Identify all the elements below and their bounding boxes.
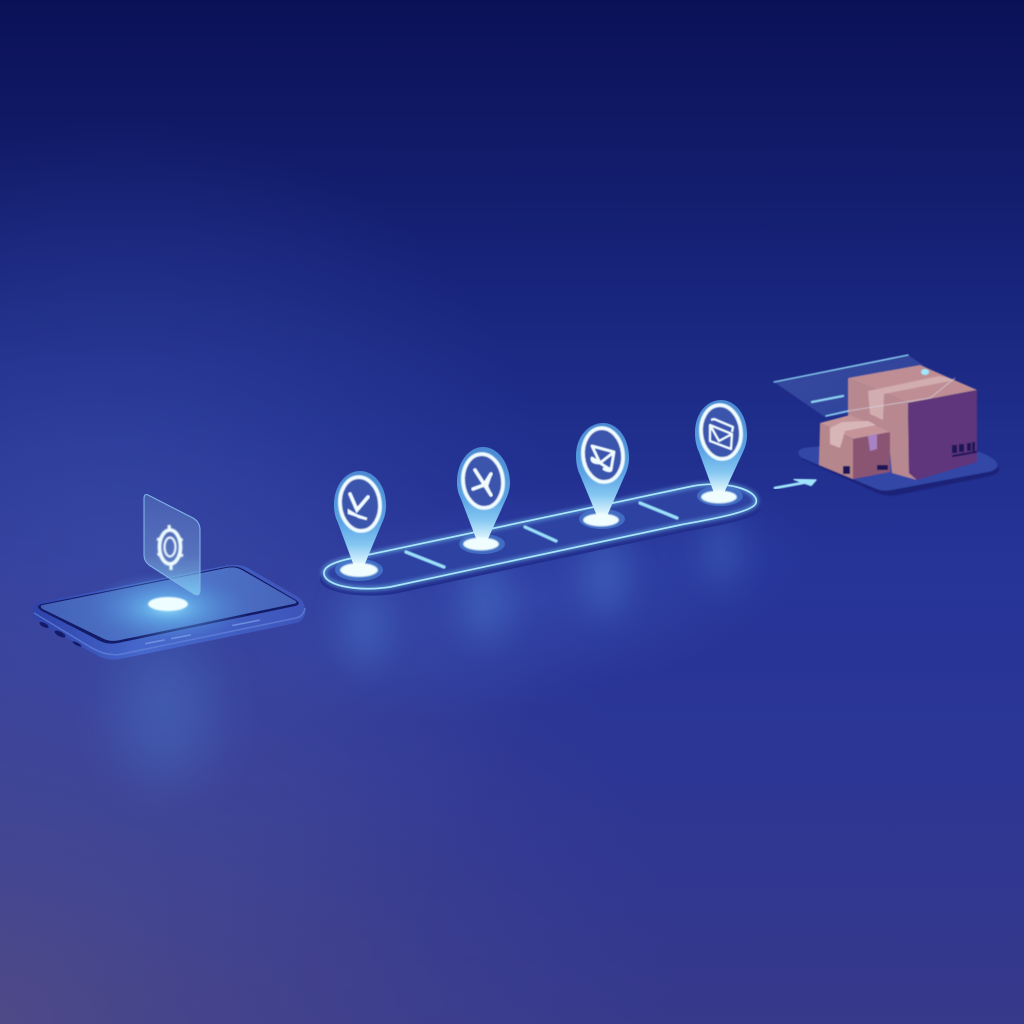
large box top face [848, 365, 977, 403]
base halo [459, 534, 505, 554]
glowing base [701, 490, 737, 504]
base halo [697, 486, 743, 506]
base halo [335, 559, 383, 581]
platform shadow [802, 440, 999, 496]
track base [320, 490, 760, 596]
location pin 1 [334, 471, 386, 581]
pin face [580, 426, 626, 484]
phone body [33, 565, 305, 660]
sheet front edge lines [774, 355, 955, 416]
large box right face [908, 390, 977, 480]
pin face [460, 452, 506, 510]
pin shape [576, 423, 629, 516]
phone screen bezel [38, 566, 299, 644]
large box barcode marks [952, 442, 977, 457]
holographic settings panel [144, 494, 200, 595]
holographic sheet [774, 355, 945, 417]
small box label [868, 434, 877, 451]
large box tape [868, 376, 955, 420]
location pin 4 [695, 400, 747, 506]
small box tape [830, 421, 876, 448]
pin face [337, 475, 383, 533]
glowing base [340, 563, 378, 577]
phone side buttons [145, 619, 260, 644]
icon: arrow to tray [349, 494, 368, 519]
small box top face [820, 415, 890, 439]
pin shape [334, 471, 386, 566]
gear icon [157, 525, 183, 570]
platform [798, 445, 997, 491]
phone ports [39, 621, 82, 648]
icon: crossed arrows [473, 470, 491, 495]
direction arrow [775, 480, 816, 488]
floor reflections [119, 514, 744, 780]
small box left face [819, 423, 853, 479]
track dashes [406, 503, 677, 567]
route track [320, 484, 760, 596]
large box left face [848, 378, 917, 480]
glowing base [463, 538, 499, 550]
track surface [324, 484, 756, 589]
location pin 3 [576, 423, 629, 529]
phone lower edge highlight [34, 608, 305, 655]
small box marks [843, 465, 888, 474]
location pin 2 [457, 447, 510, 554]
pin shape [457, 447, 510, 541]
screen light pool [86, 572, 250, 644]
small box right face [853, 432, 890, 479]
track line [324, 484, 756, 589]
glowing emitter [148, 597, 188, 611]
icon: folded envelope [592, 446, 614, 471]
phone screen [41, 567, 297, 641]
parcels on platform [774, 355, 999, 496]
sheet light point [921, 369, 929, 375]
glowing base [583, 514, 619, 526]
track glow outline [324, 484, 756, 589]
base halo [579, 509, 625, 529]
icon: open envelope [710, 419, 733, 449]
phone [33, 494, 305, 660]
pin shape [695, 400, 747, 493]
pin face [698, 403, 744, 461]
